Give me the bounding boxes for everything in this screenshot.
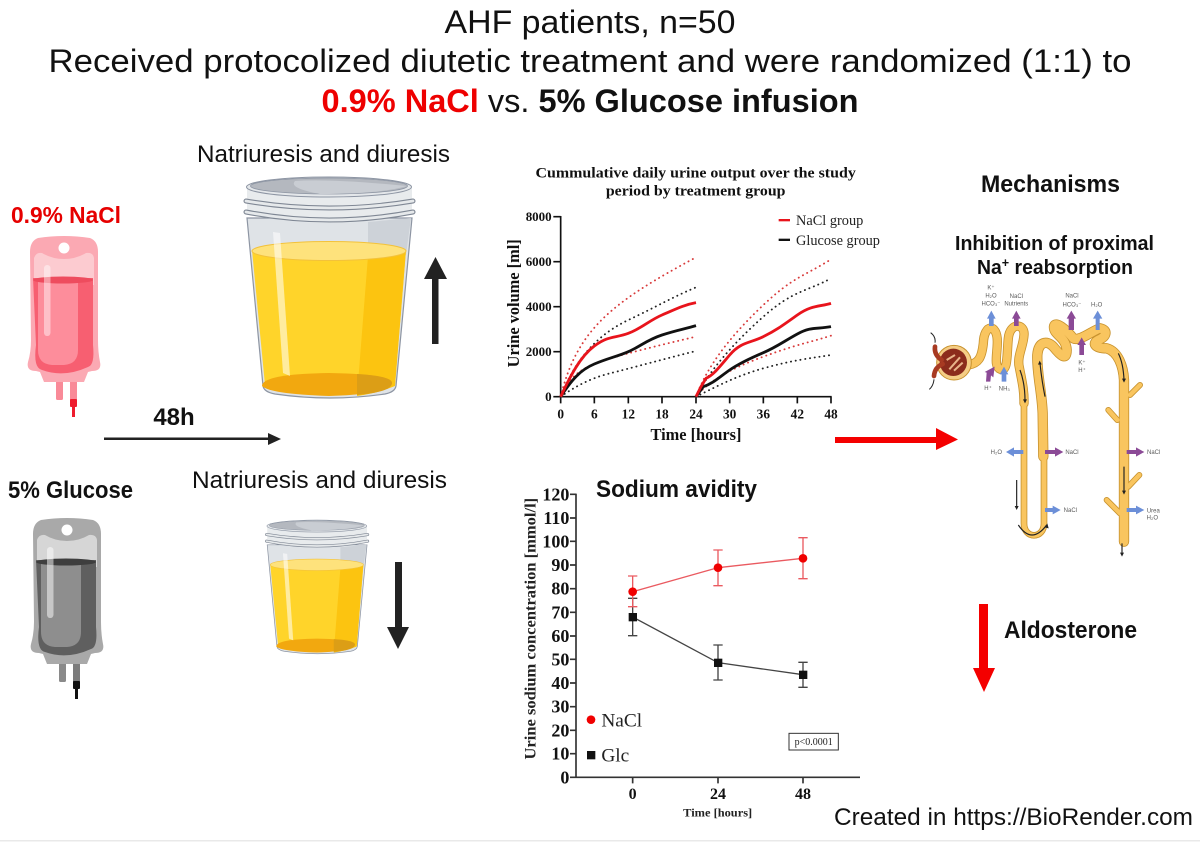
y tick labels: 120 [542,484,569,504]
icon: large urine cup [246,177,413,398]
heading: inhibition of proximal reabsorption [955,233,1154,279]
transport labels: Urea [1147,508,1160,514]
chart title: Cummulative daily urine output over the study [535,165,856,181]
x tick labels: 12 [622,406,635,421]
x tick labels: 0 [557,406,564,421]
transport labels: H₂O [1147,515,1158,521]
y tick labels: 30 [551,697,569,717]
x axis title: Time [hours] [683,806,752,820]
label: aldosterone: Aldosterone [1004,617,1137,644]
purple transport arrows [985,311,1144,457]
y tick labels [542,484,569,787]
y tick labels: 0 [545,389,552,404]
axes [553,216,832,403]
heading: inhibition of proximal reabsorption: Inhibition of proximal [955,233,1154,255]
dotted confidence bounds [561,257,831,397]
heading: natriuresis and diuresis, glucose: Natriuresis and diuresis [192,467,447,494]
heading: sodium avidity: Sodium avidity [596,476,758,503]
heading: mechanisms: Mechanisms [981,171,1120,198]
x tick labels: 0 [629,786,637,803]
chart: cumulative urine output [504,165,880,444]
x tick labels: 48 [824,406,838,421]
y tick labels: 50 [551,649,569,669]
y tick labels: 0 [560,767,569,787]
NaCl series [628,538,808,607]
x tick labels: 6 [591,406,598,421]
diagram: nephron [929,285,1160,557]
icon: small urine cup [267,520,368,654]
x tick labels: 24 [710,786,726,803]
y tick labels [526,209,552,404]
legend [587,711,642,767]
title: Received protocolized diutetic treatment and were randomized (1:1) to [48,43,1132,79]
x tick labels: 30 [723,406,737,421]
arrow: 48h timeline [104,404,281,445]
x tick labels: 36 [757,406,770,421]
transport labels: H⁺ [1078,367,1086,374]
blue transport arrows [987,311,1144,514]
glomerulus [929,333,971,389]
axes [570,494,860,783]
y axis title: Urine sodium concentration [mmol/l] [522,498,539,759]
x tick labels [557,406,838,421]
heading: inhibition of proximal reabsorption: Na [977,257,1003,279]
p value box [789,733,838,750]
legend: Glucose group [796,233,880,249]
solid group lines [561,303,831,397]
credit: Created in https://BioRender.com [834,804,1193,831]
title: AHF patients, n=50 [444,4,736,40]
icon: glucose IV bag [31,518,103,699]
legend: Glc [601,746,629,767]
transport labels: H₂O [991,450,1002,456]
chart title [535,165,856,200]
legend: NaCl [601,711,642,732]
heading: 0.9% NaCl: 0.9% NaCl [11,202,121,228]
y tick labels: 8000 [526,209,552,224]
transport labels: K⁺ [987,285,995,292]
nephron tubule [968,324,1140,542]
y tick labels: 110 [543,508,569,528]
glucose series [628,598,808,687]
y tick labels: 4000 [526,299,552,314]
y tick labels: 60 [551,626,569,646]
legend [779,213,880,249]
title: 0.9% NaCl vs. 5% Glucose infusion [322,83,858,119]
transport labels: K⁺ [1078,359,1086,366]
arrow: aldosterone decrease [973,604,995,692]
y tick labels: 2000 [526,344,552,359]
heading: 5% Glucose: 5% Glucose [8,477,133,504]
y tick labels: 100 [542,531,569,551]
transport labels: NaCl [1065,293,1079,299]
y tick labels: 90 [551,555,569,575]
transport labels [982,285,1160,521]
transport labels: NaCl [1010,294,1023,300]
p value box: p<0.0001 [795,737,833,748]
transport labels: NaCl [1065,450,1079,456]
arrow: decrease [387,562,409,649]
title [48,4,1132,119]
transport labels: NH₃ [999,387,1010,393]
heading: natriuresis and diuresis, NaCl: Natriuresis and diuresis [197,141,450,168]
y tick labels: 80 [551,579,569,599]
chart: urine sodium concentration [522,484,860,820]
y tick labels: 10 [551,744,569,764]
arrow: 48h timeline: 48h [153,404,195,431]
heading: inhibition of proximal reabsorption: reabsorption [1009,257,1133,279]
y tick labels: 20 [551,720,569,740]
transport labels: H⁺ [984,385,992,392]
y tick labels: 6000 [526,254,552,269]
transport labels: NaCl [1064,508,1077,514]
transport labels: NaCl [1147,450,1160,456]
x tick labels: 18 [655,406,669,421]
y tick labels: 70 [551,602,569,622]
x tick labels [629,786,811,803]
chart title: period by treatment group [606,184,785,200]
transport labels: H₂O [985,293,997,299]
flow arrows [1015,353,1126,557]
transport labels: HCO₃⁻ [982,302,1000,308]
heading: inhibition of proximal reabsorption: + [1002,255,1010,270]
x tick labels: 24 [689,406,703,421]
arrow: red to mechanisms [835,428,958,450]
x axis title: Time [hours] [650,425,741,444]
y tick labels: 40 [551,673,569,693]
arrow: increase [424,257,447,344]
x tick labels: 48 [795,786,811,803]
transport labels: H₂O [1091,302,1103,308]
y axis title: Urine volume [ml] [504,239,523,367]
transport labels: HCO₃⁻ [1063,302,1081,308]
legend: NaCl group [796,213,863,229]
transport labels: Nutrients [1004,302,1028,308]
icon: NaCl IV bag [28,236,100,417]
x tick labels: 42 [791,406,804,421]
